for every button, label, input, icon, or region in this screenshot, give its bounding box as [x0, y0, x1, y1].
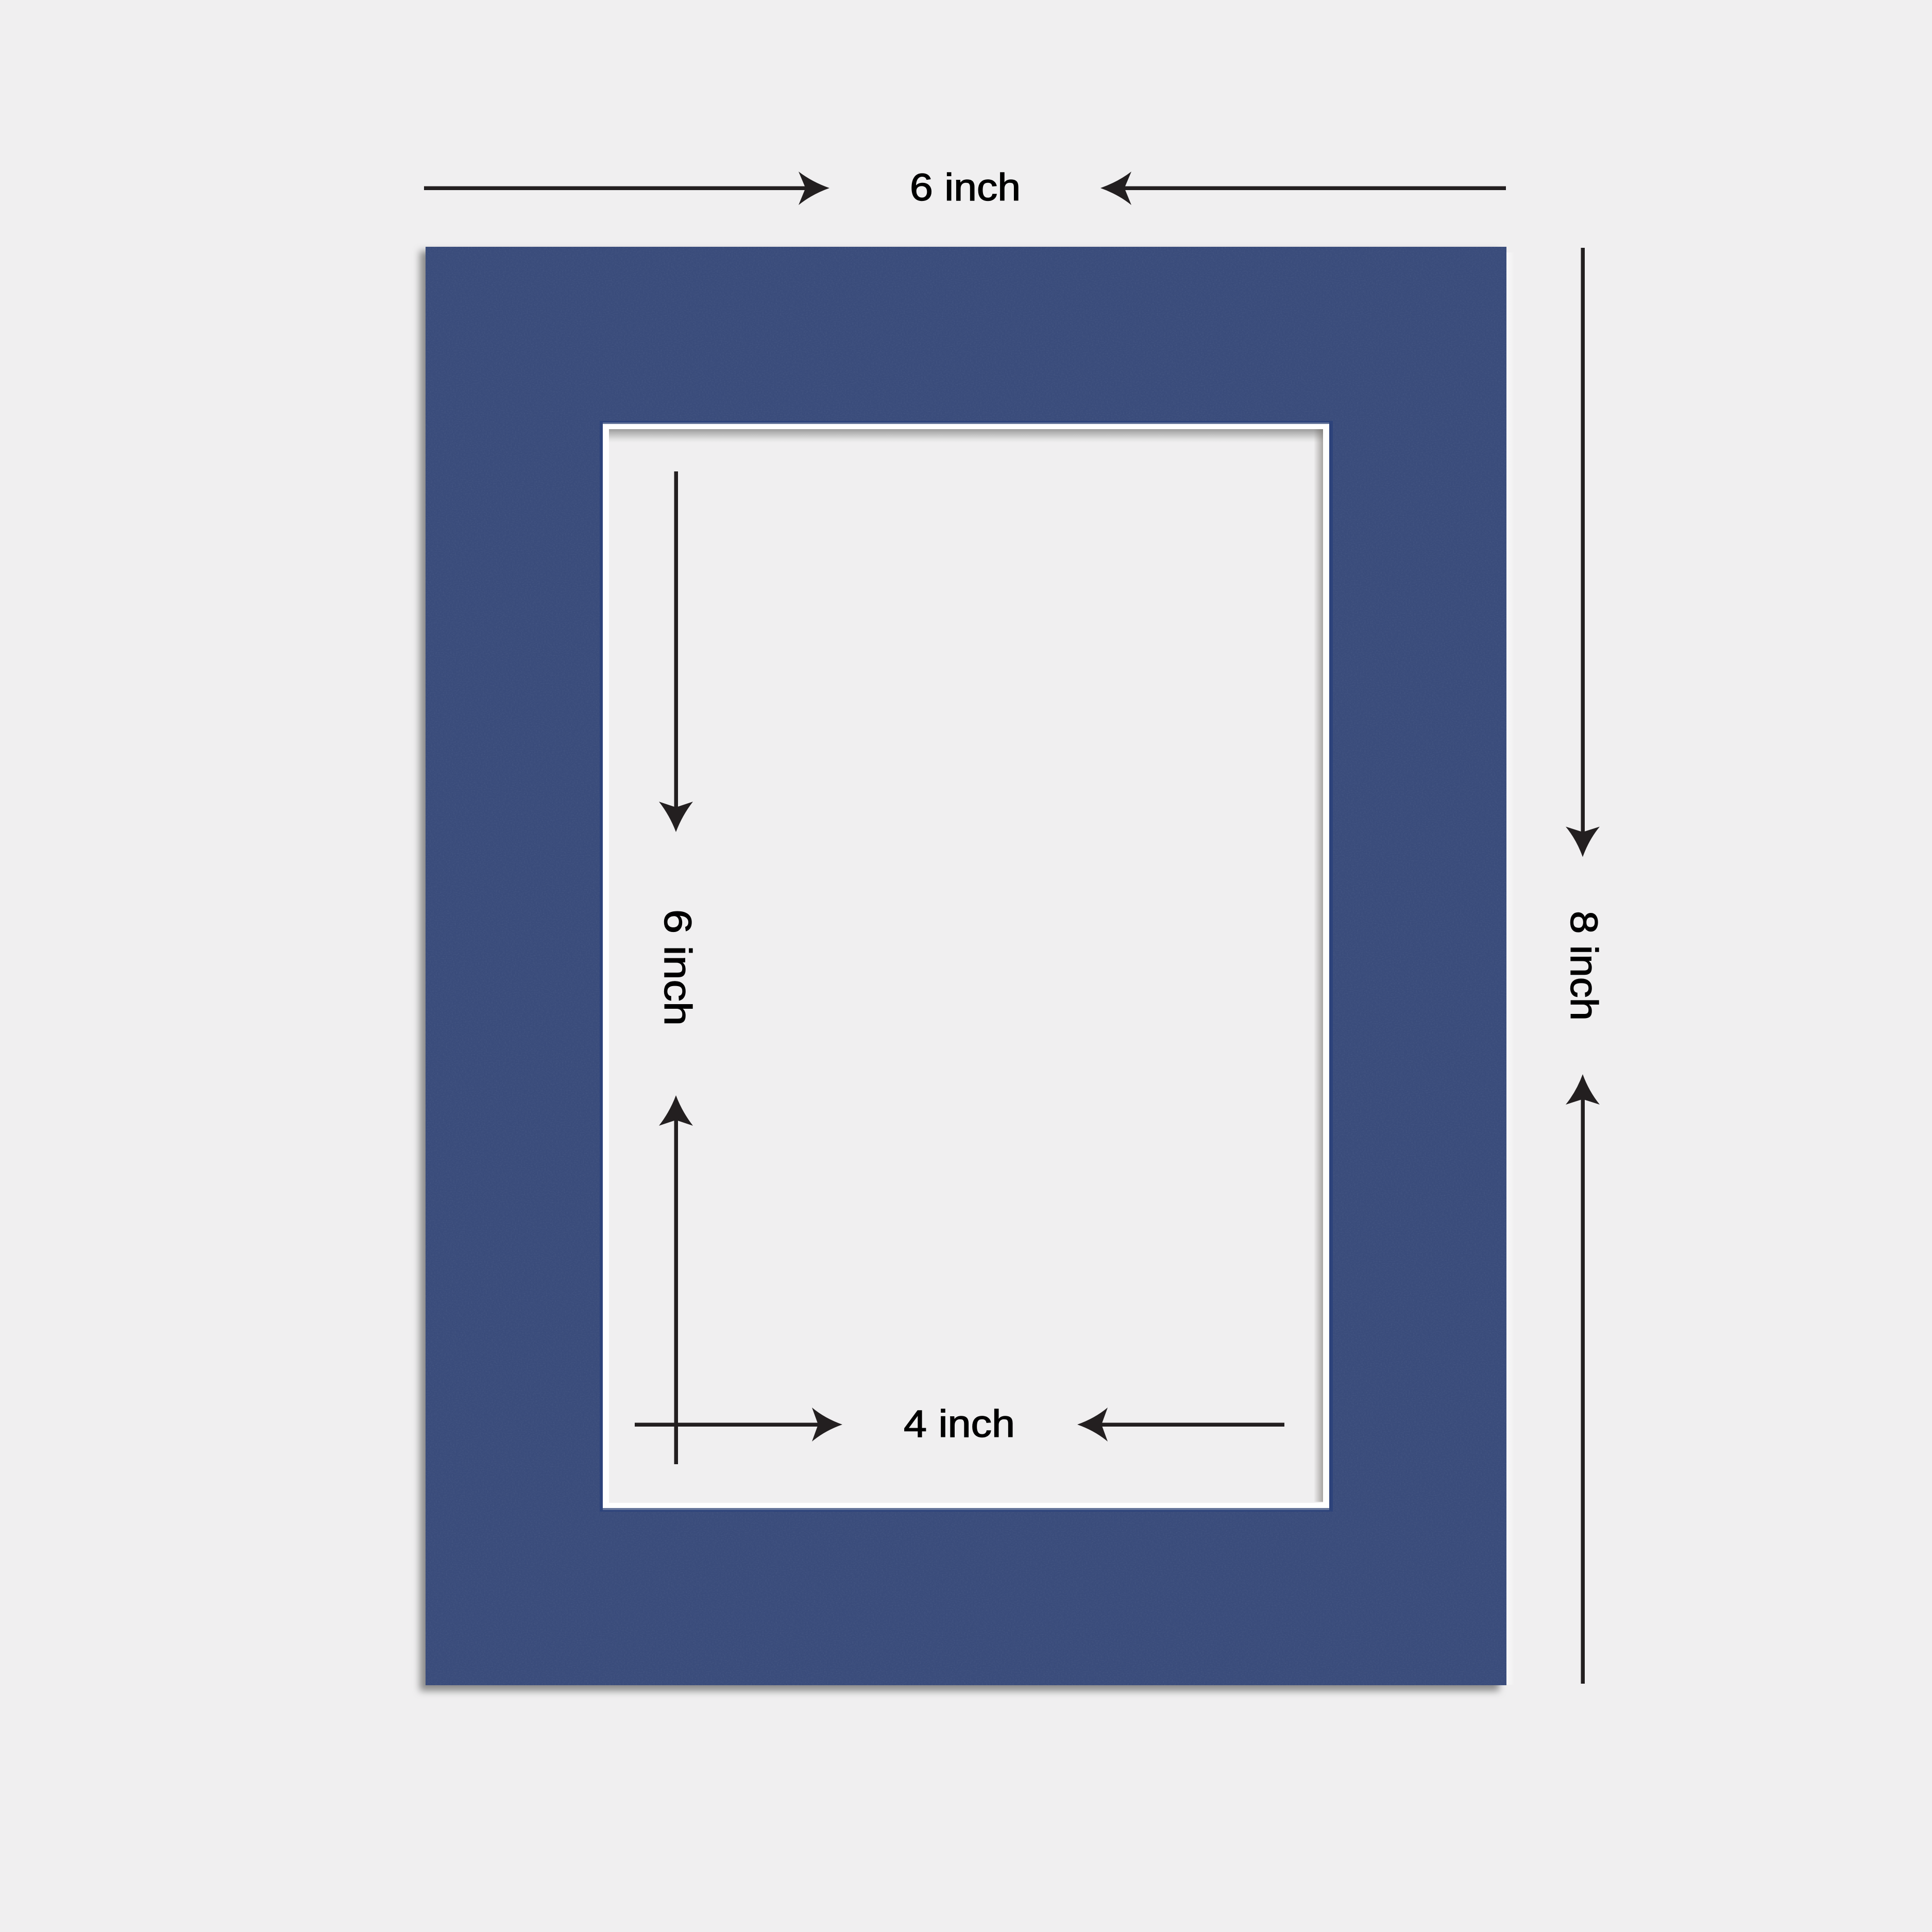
label: right height 8 inch: 8 inch	[1563, 911, 1605, 1021]
arrow: inner width, right segment	[1077, 1408, 1284, 1442]
mat window cut-out	[600, 421, 1333, 1512]
label: top width 6 inch: 6 inch	[910, 166, 1021, 209]
label: inner width 4 inch: 4 inch	[904, 1402, 1015, 1445]
panel: blue photo mat	[420, 247, 1515, 1691]
label: inner height 6 inch: 6 inch	[656, 909, 699, 1026]
arrow: top width, left segment	[424, 172, 829, 205]
arrow: top width, right segment	[1100, 172, 1506, 205]
arrow: inner height, lower segment	[659, 1095, 693, 1464]
arrow: right height, lower segment	[1566, 1074, 1600, 1684]
arrow: inner width, left segment	[635, 1408, 842, 1442]
arrow: inner height, upper segment	[659, 471, 693, 832]
arrow: right height, upper segment	[1566, 248, 1600, 857]
